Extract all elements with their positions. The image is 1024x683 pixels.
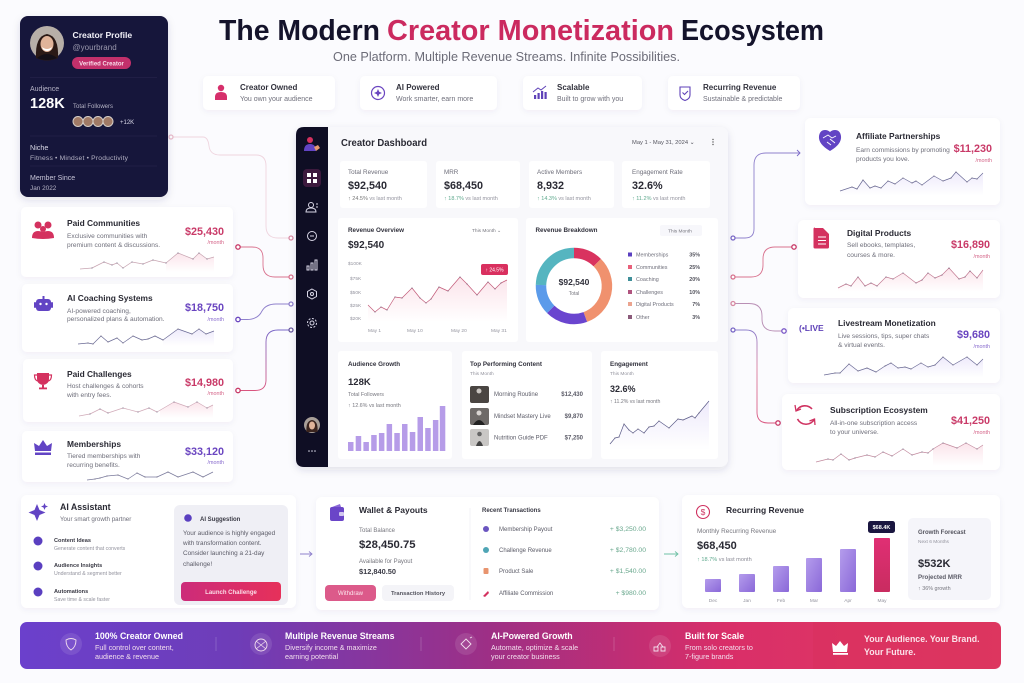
panel: engagement: ↑ 11.2% vs last month: [610, 399, 660, 405]
title: Ecosystem: [681, 15, 824, 47]
panel: audience growth: [338, 351, 452, 459]
card: memberships: recurring benefits.: [67, 462, 120, 469]
ai suggestion box: [174, 505, 288, 605]
stat card: mrr: ↑ 18.7% vs last month: [444, 196, 498, 202]
panel: top performing content: [462, 351, 592, 459]
card: ai coaching systems: AI-powered coaching,: [67, 308, 131, 315]
nav item: automation: [308, 289, 316, 299]
badge: growth: [481, 264, 508, 275]
panel: audience growth: ↑ 12.6% vs last month: [348, 403, 401, 409]
feature chip: creator owned: [203, 76, 335, 110]
benefit: creator owned: audience & revenue: [95, 652, 159, 661]
panel: wallet and payouts: Total Balance: [359, 528, 396, 534]
icon: logo: [304, 137, 320, 151]
card: paid communities: Paid Communities: [67, 218, 140, 228]
panel: engagement: This Month: [610, 371, 634, 377]
stat card: total revenue: ↑ 24.5% vs last month: [348, 196, 402, 202]
card: subscription ecosystem: [782, 394, 1000, 470]
row: nutrition guide: [470, 429, 584, 446]
card: subscription ecosystem: All-in-one subscription access: [830, 420, 918, 427]
benefit: multiple revenue streams: Diversify income & maximize: [285, 643, 377, 652]
card: subscription ecosystem: $41,250: [951, 415, 990, 427]
sparkline: [816, 443, 983, 466]
benefit: ai powered growth: your creator business: [491, 652, 560, 661]
panel: creator dashboard: [296, 127, 728, 467]
card: paid communities: $25,430: [185, 226, 224, 238]
connector: paid communities: [236, 245, 293, 279]
card: subscription ecosystem: to your universe.: [830, 429, 879, 436]
sparkline: [87, 472, 213, 480]
arrow: wallet to recurring: [664, 552, 678, 556]
panel: engagement: [601, 351, 718, 459]
button: withdraw: Withdraw: [338, 591, 364, 597]
card: affiliate partnerships: products you love.: [856, 156, 910, 163]
transaction: affiliate commission: Affiliate Commission: [499, 591, 553, 597]
connector: ai coaching: [236, 302, 293, 322]
item: automations: Automations: [54, 589, 88, 595]
transaction: affiliate commission: [483, 590, 646, 597]
badge: verified: [72, 57, 131, 69]
legend: Other: [636, 315, 650, 321]
button: launch challenge: Launch Challenge: [205, 590, 257, 596]
card: livestream monetization: [788, 308, 1000, 383]
panel: revenue overview: May 20: [451, 328, 467, 334]
button: withdraw: [325, 585, 376, 601]
donut chart: $92,540: [559, 277, 590, 287]
icon: handshake heart: [819, 130, 841, 151]
card: paid challenges: Paid Challenges: [67, 369, 132, 379]
connector: profile to dashboard: [169, 135, 293, 240]
nav item: settings: [308, 318, 316, 328]
stat card: mrr: $68,450: [444, 180, 483, 192]
badge: growth: ↑ 24.5%: [485, 268, 504, 274]
nav item: chat: [308, 232, 316, 240]
stat card: mrr: MRR: [444, 169, 459, 176]
panel: engagement: Engagement: [610, 361, 649, 368]
panel: recurring revenue: $68,450: [697, 540, 737, 552]
icon: document: [814, 228, 829, 248]
nav item: analytics: [307, 260, 317, 270]
feature chip: creator owned: Creator Owned: [240, 83, 297, 92]
transaction: product sale: + $1,540.00: [610, 568, 646, 575]
legend: 20%: [689, 277, 700, 283]
badge: verified: Verified Creator: [79, 61, 125, 67]
panel: creator profile: Audience: [30, 86, 59, 93]
benefit: multiple revenue streams: earning potential: [285, 652, 339, 661]
card: memberships: $33,120: [185, 446, 224, 458]
panel: creator profile: Member Since: [30, 175, 75, 182]
avatar: [30, 26, 64, 60]
row: mindset mastery: [470, 408, 584, 425]
bar chart: monthly recurring revenue: [705, 538, 890, 604]
stat card: engagement rate: ↑ 11.2% vs last month: [632, 196, 685, 202]
legend: Communities: [636, 265, 668, 271]
growth forecast box: Growth Forecast: [918, 530, 966, 536]
feature chip: ai powered: AI Powered: [396, 83, 440, 92]
panel: wallet and payouts: Wallet & Payouts: [359, 505, 428, 515]
feature chip: ai powered: Work smarter, earn more: [396, 96, 473, 103]
panel: wallet and payouts: $28,450.75: [359, 539, 416, 551]
card: memberships: /month: [208, 460, 224, 466]
panel: revenue overview: May 31: [491, 328, 507, 334]
card: affiliate partnerships: /month: [976, 158, 992, 164]
icon: growth chart: [533, 86, 547, 99]
row: mindset mastery: $9,870: [565, 414, 584, 420]
growth forecast box: $532K: [918, 558, 950, 570]
card: affiliate partnerships: Earn commissions by promoting: [856, 147, 950, 154]
row: morning routine: $12,430: [561, 392, 584, 398]
benefit: built for scale: Built for Scale: [685, 631, 744, 641]
ai suggestion box: with transformation content.: [182, 540, 262, 547]
transaction: product sale: [484, 568, 646, 575]
card: paid communities: Exclusive communities with: [67, 233, 148, 240]
panel: ai assistant: AI Assistant: [60, 502, 111, 512]
connector: digital products: [731, 245, 796, 279]
button: transaction history: Transaction History: [391, 591, 446, 597]
card: digital products: courses & more.: [847, 252, 895, 259]
card: subscription ecosystem: /month: [974, 430, 990, 436]
donut chart: Total: [569, 291, 579, 297]
stat card: total revenue: $92,540: [348, 180, 387, 192]
legend: 10%: [689, 290, 700, 296]
icon: check shield: [680, 87, 690, 100]
panel: revenue overview: $100K: [348, 261, 363, 267]
connector: subscription: [731, 328, 780, 425]
connector: affiliate arrow: [731, 150, 800, 240]
feature chip: creator owned: You own your audience: [240, 96, 313, 103]
bar chart: audience: [348, 406, 445, 451]
sidebar: [296, 127, 328, 467]
card: memberships: Memberships: [67, 439, 121, 449]
tooltip: [868, 521, 895, 533]
item: audience insights: Audience Insights: [54, 563, 102, 569]
panel: wallet and payouts: Available for Payout: [359, 559, 413, 565]
card: ai coaching systems: personalized plans & automation.: [67, 316, 165, 323]
button: transaction history: [382, 585, 454, 601]
growth forecast box: ↑ 36% growth: [918, 586, 951, 592]
icon: ai shield: [372, 86, 384, 100]
panel: revenue overview: $25K: [350, 303, 362, 309]
panel: revenue overview: $75K: [350, 276, 362, 282]
item: automations: Save time & scale faster: [54, 597, 110, 603]
panel: recurring revenue: [682, 495, 1000, 608]
ai suggestion box: Your audience is highly engaged: [183, 530, 276, 537]
follower avatars: [73, 116, 113, 126]
stat card: active members: Active Members: [537, 169, 582, 176]
item: content ideas: Content Ideas: [54, 538, 91, 544]
panel: revenue breakdown: This Month: [668, 228, 692, 234]
panel: creator profile: Jan 2022: [30, 185, 57, 192]
item: audience insights: Understand & segment better: [54, 571, 122, 577]
card: digital products: $16,890: [951, 239, 990, 251]
sparkline: [824, 357, 983, 378]
stat card: engagement rate: [622, 161, 710, 208]
legend: Coaching: [636, 277, 659, 283]
card: digital products: Sell ebooks, templates,: [847, 242, 915, 249]
subtitle: One Platform. Multiple Revenue Streams. Infinite Possibilities.: [333, 49, 680, 64]
callout: your audience: [832, 634, 980, 657]
card: digital products: Digital Products: [847, 228, 912, 238]
transaction: membership payout: [483, 526, 646, 533]
icon: dollar circle: $: [701, 507, 706, 517]
ai suggestion box: AI Suggestion: [200, 517, 241, 523]
panel: revenue breakdown: [526, 218, 718, 342]
icon: sparkles: [28, 503, 48, 521]
line chart: engagement: [610, 401, 709, 450]
nav item: active grid: [303, 169, 321, 187]
icon: dollar circle: [696, 506, 710, 518]
panel: revenue overview: May 1: [368, 328, 381, 334]
bar chart: monthly recurring revenue: Dec: [709, 598, 718, 604]
card: ai coaching systems: [22, 284, 233, 352]
feature chip: ai powered: [360, 76, 497, 110]
card: ai coaching systems: AI Coaching Systems: [67, 293, 153, 303]
icon: trophy: [34, 373, 52, 389]
card: paid challenges: [23, 359, 233, 422]
benefit: built for scale: From solo creators to: [685, 643, 753, 652]
card: livestream monetization: & virtual events.: [838, 342, 885, 349]
card: livestream monetization: /month: [974, 344, 990, 350]
icon: refresh: [795, 405, 815, 425]
icon: crown: [34, 440, 52, 455]
panel: top performing content: Top Performing Content: [470, 361, 543, 368]
item: content ideas: Generate content that converts: [54, 546, 126, 552]
icon: live: (•LIVE: [799, 323, 824, 333]
panel: revenue overview: $20K: [350, 316, 362, 322]
stat card: active members: 8,932: [537, 180, 564, 192]
connector: livestream: [731, 302, 786, 333]
benefit: multiple revenue streams: [250, 631, 395, 661]
bar chart: monthly recurring revenue: May: [877, 598, 887, 604]
callout: your audience: Your Future.: [864, 647, 916, 657]
panel: revenue overview: $50K: [350, 290, 362, 296]
card: affiliate partnerships: [805, 118, 1000, 205]
transaction: product sale: Product Sale: [499, 569, 534, 575]
benefit: built for scale: 7-figure brands: [685, 652, 734, 661]
panel: wallet and payouts: Recent Transactions: [482, 508, 541, 514]
stat card: total revenue: Total Revenue: [348, 169, 389, 176]
panel: wallet and payouts: $12,840.50: [359, 567, 396, 576]
sparkline: [840, 172, 983, 196]
stat card: active members: ↑ 14.3% vs last month: [537, 196, 591, 202]
benefit: multiple revenue streams: Multiple Revenue Streams: [285, 631, 395, 641]
arrow: assistant to wallet: [300, 552, 312, 556]
benefit: creator owned: Full control over content,: [95, 643, 174, 652]
card: paid challenges: $14,980: [185, 377, 224, 389]
feature chip: recurring revenue: [668, 76, 800, 110]
growth forecast box: [908, 518, 991, 600]
feature chip: scalable: [523, 76, 642, 110]
transaction: membership payout: + $3,250.00: [610, 526, 646, 533]
card: affiliate partnerships: Affiliate Partnerships: [856, 131, 941, 141]
panel: revenue overview: $92,540: [348, 240, 385, 251]
growth forecast box: Projected MRR: [918, 574, 963, 581]
panel: wallet and payouts: [316, 497, 659, 610]
nav item: members: [306, 202, 318, 212]
card: ai coaching systems: /month: [208, 317, 224, 323]
row: mindset mastery: Mindset Mastery Live: [494, 414, 551, 420]
panel: recurring revenue: Recurring Revenue: [726, 505, 804, 515]
card: paid challenges: with entry fees.: [66, 392, 112, 399]
icon: robot: [34, 296, 53, 311]
panel: revenue breakdown: Revenue Breakdown: [536, 227, 598, 234]
icon: wallet: [330, 504, 344, 521]
icon: people: [32, 222, 54, 239]
bar chart: monthly recurring revenue: Apr: [844, 598, 852, 604]
dashboard heading: Creator Dashboard: [341, 138, 427, 149]
panel: audience growth: Total Followers: [348, 392, 384, 398]
panel: creator profile: Niche: [30, 143, 48, 152]
tooltip: $68.4K: [873, 525, 890, 531]
panel: creator profile: Total Followers: [73, 104, 113, 110]
panel: revenue overview: This Month ⌄: [472, 228, 501, 234]
title: [219, 15, 824, 47]
panel: recurring revenue: ↑ 18.7% vs last month: [697, 557, 752, 563]
transaction: membership payout: Membership Payout: [499, 527, 553, 533]
card: paid communities: [21, 207, 233, 277]
item: audience insights: [34, 562, 122, 577]
benefit: creator owned: 100% Creator Owned: [95, 631, 183, 641]
benefit: built for scale: [649, 631, 753, 661]
legend: 3%: [692, 315, 700, 321]
card: memberships: Tiered memberships with: [67, 453, 141, 460]
donut chart: [541, 253, 607, 319]
ai suggestion box: Consider launching a 21-day: [183, 550, 265, 557]
panel: revenue overview: Revenue Overview: [348, 227, 404, 234]
transaction: challenge revenue: Challenge Revenue: [499, 548, 552, 554]
icon: creator person: [215, 85, 227, 100]
legend: 25%: [689, 265, 700, 271]
item: content ideas: [34, 536, 126, 552]
item: automations: [34, 588, 110, 603]
feature chip: scalable: Scalable: [557, 83, 590, 92]
transaction: affiliate commission: + $980.00: [616, 590, 646, 597]
legend: Challenges: [636, 290, 663, 296]
legend: [628, 252, 700, 321]
row: nutrition guide: Nutrition Guide PDF: [494, 436, 548, 442]
panel: creator profile: 128K: [30, 96, 65, 112]
panel: engagement: 32.6%: [610, 384, 636, 394]
panel: creator profile: [20, 16, 168, 197]
feature chip: scalable: Built to grow with you: [557, 96, 623, 103]
legend: Digital Products: [636, 302, 674, 308]
transaction: challenge revenue: [483, 547, 646, 554]
panel: ai assistant: Your smart growth partner: [60, 516, 131, 523]
card: paid challenges: /month: [208, 391, 224, 397]
card: paid communities: premium content & discussions.: [67, 242, 160, 249]
bar chart: monthly recurring revenue: Mar: [810, 598, 819, 604]
bar chart: monthly recurring revenue: Feb: [777, 598, 785, 604]
panel: creator profile: Fitness • Mindset • Productivity: [30, 155, 129, 162]
card: memberships: [22, 431, 233, 482]
panel: recurring revenue: Monthly Recurring Revenue: [697, 528, 777, 535]
stat card: active members: [529, 161, 614, 208]
title: Creator Monetization: [387, 15, 674, 47]
title: The Modern: [219, 15, 380, 47]
growth forecast box: Next 6 Months: [918, 539, 950, 545]
sparkline: [838, 268, 983, 292]
benefit: ai powered growth: [455, 631, 578, 661]
sidebar avatar: [304, 417, 320, 433]
callout: your audience: Your Audience. Your Brand.: [864, 634, 980, 644]
card: paid communities: /month: [208, 240, 224, 246]
stat card: engagement rate: 32.6%: [632, 180, 663, 192]
footer banner: [20, 622, 1001, 669]
panel: revenue overview: May 10: [407, 328, 423, 334]
card: livestream monetization: Live sessions, tips, super chats: [838, 333, 930, 340]
card: digital products: /month: [974, 254, 990, 260]
legend: Memberships: [636, 252, 669, 258]
card: ai coaching systems: $18,750: [185, 302, 224, 314]
row: morning routine: [470, 386, 584, 403]
card: subscription ecosystem: Subscription Ecosystem: [830, 405, 928, 415]
panel: creator profile: @yourbrand: [72, 43, 117, 52]
panel: revenue overview: [338, 218, 518, 342]
stat card: mrr: [436, 161, 520, 208]
feature chip: recurring revenue: Recurring Revenue: [703, 83, 777, 92]
transaction: challenge revenue: + $2,780.00: [610, 547, 646, 554]
card: livestream monetization: $9,680: [957, 329, 990, 341]
connector: paid challenges: [236, 328, 293, 393]
row: nutrition guide: $7,250: [565, 436, 584, 442]
sparkline: [80, 253, 214, 272]
feature chip: recurring revenue: Sustainable & predictable: [703, 96, 782, 103]
legend: 7%: [692, 302, 700, 308]
panel: ai assistant: [21, 495, 296, 608]
benefit: ai powered growth: Automate, optimize & scale: [491, 643, 578, 652]
panel: creator profile: +12K: [120, 120, 134, 126]
card: livestream monetization: Livestream Monetization: [838, 318, 936, 328]
panel: creator profile: Creator Profile: [72, 30, 132, 40]
panel: audience growth: Audience Growth: [348, 361, 400, 368]
benefit: creator owned: [60, 631, 183, 661]
sparkline: [78, 329, 214, 346]
date range: May 1 - May 31, 2024 ⌄: [632, 140, 695, 146]
ai suggestion box: challenge!: [183, 561, 212, 568]
row: morning routine: Morning Routine: [494, 392, 539, 398]
card: affiliate partnerships: $11,230: [954, 143, 992, 155]
panel: audience growth: 128K: [348, 377, 371, 388]
line chart: revenue: [368, 277, 507, 322]
stat card: total revenue: [340, 161, 427, 208]
stat card: engagement rate: Engagement Rate: [632, 169, 683, 176]
legend: 35%: [689, 252, 700, 258]
card: paid challenges: Host challenges & cohorts: [67, 383, 144, 390]
bar chart: monthly recurring revenue: Jan: [743, 598, 751, 604]
sparkline: [79, 402, 213, 418]
panel: top performing content: This Month: [470, 371, 494, 377]
card: digital products: [798, 220, 1000, 298]
benefit: ai powered growth: AI-Powered Growth: [491, 631, 573, 641]
